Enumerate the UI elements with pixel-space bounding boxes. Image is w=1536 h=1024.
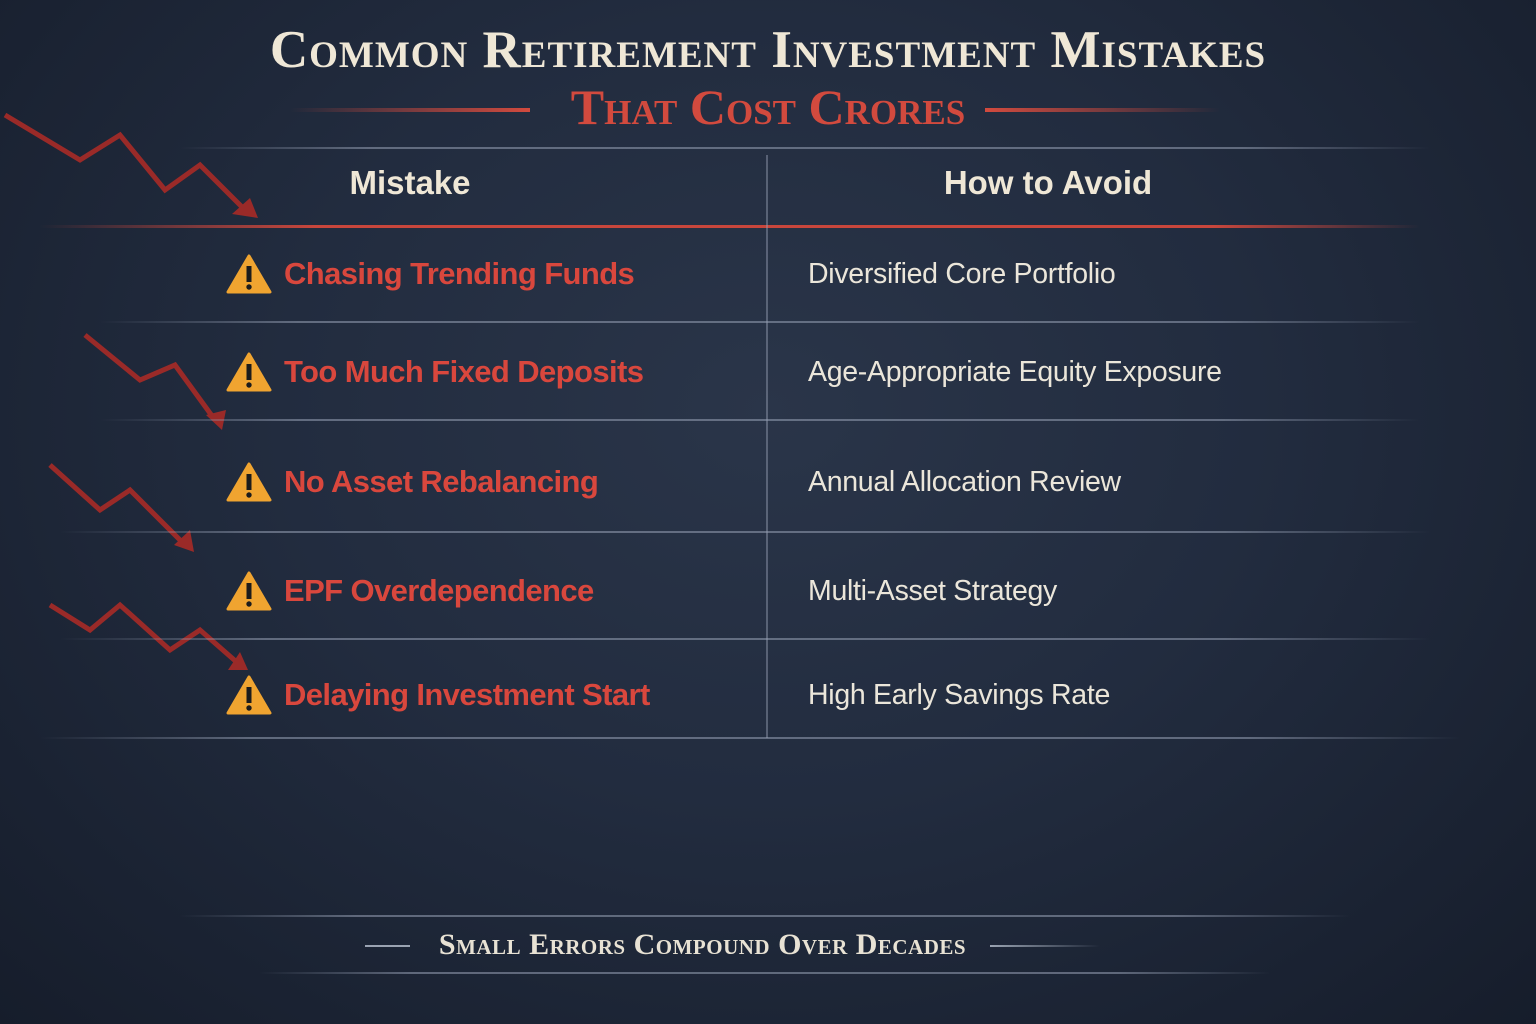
row 5 avoid: High Early Savings Rate xyxy=(808,678,1110,710)
decorative downward arrows xyxy=(4,112,258,670)
row 3 mistake: No Asset Rebalancing xyxy=(284,464,598,499)
header: how to avoid: How to Avoid xyxy=(944,164,1152,201)
row 1 mistake: Chasing Trending Funds xyxy=(284,256,634,291)
subtitle: That Cost Crores xyxy=(571,79,965,135)
title: Common Retirement Investment Mistakes xyxy=(270,21,1266,79)
row 4 avoid: Multi-Asset Strategy xyxy=(808,574,1057,606)
footer tagline: Small Errors Compound Over Decades xyxy=(439,928,966,961)
table xyxy=(54,147,1435,739)
row 2 mistake: Too Much Fixed Deposits xyxy=(284,354,643,389)
row 3 avoid: Annual Allocation Review xyxy=(808,466,1121,498)
row 1 avoid: Diversified Core Portfolio xyxy=(808,258,1115,290)
header: mistake: Mistake xyxy=(349,164,471,201)
row 2 avoid: Age-Appropriate Equity Exposure xyxy=(808,356,1222,388)
row 4 mistake: EPF Overdependence xyxy=(284,573,594,608)
row 5 mistake: Delaying Investment Start xyxy=(284,677,650,712)
